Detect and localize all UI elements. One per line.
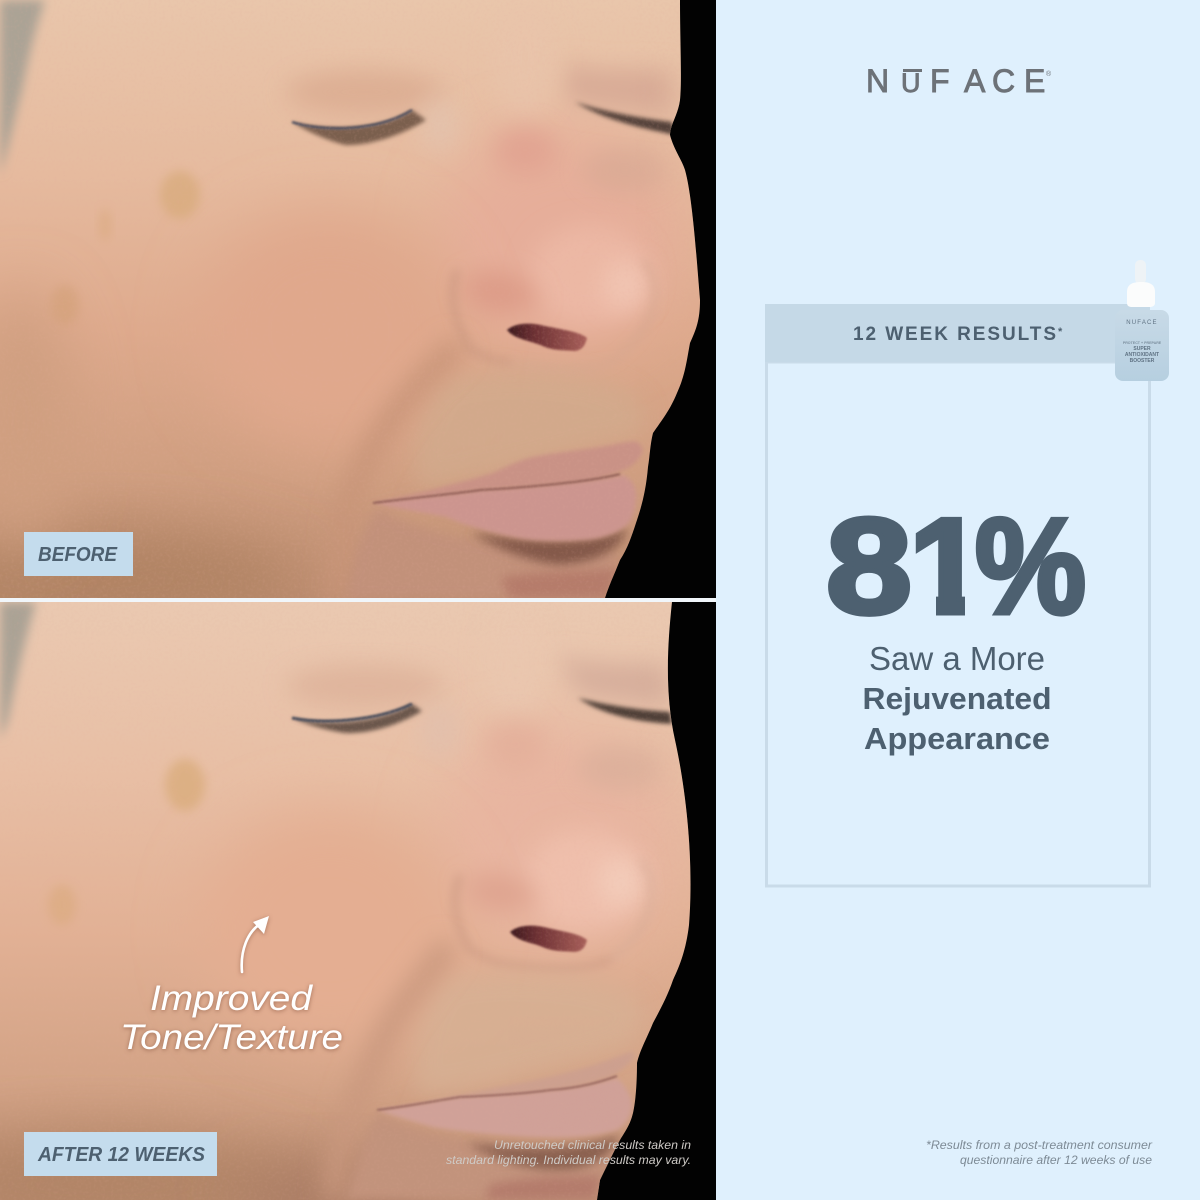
right eyelid <box>564 657 670 708</box>
eye lash left <box>292 704 422 733</box>
chin <box>348 1146 617 1200</box>
upper lip skin <box>426 433 568 476</box>
hair <box>0 602 36 740</box>
lower lip shadow <box>470 528 628 565</box>
icon: product bottle: BOOSTER <box>1130 358 1155 364</box>
photo: after <box>0 600 716 1200</box>
nose bridge <box>493 0 557 120</box>
upper lip skin <box>423 1033 596 1092</box>
statistic: 81% <box>826 490 1086 642</box>
photo disclaimer <box>446 1138 691 1167</box>
sun spots <box>160 171 200 219</box>
footnote: questionnaire after 12 weeks of use <box>960 1153 1152 1167</box>
header asterisk: * <box>1058 326 1063 338</box>
nose bridge <box>483 600 547 720</box>
label: before <box>24 532 133 576</box>
nostril <box>510 926 587 952</box>
hair <box>0 0 45 175</box>
logo: NuFACE: N <box>866 63 889 99</box>
photo divider <box>0 598 716 602</box>
skin texture <box>298 110 670 559</box>
icon: product bottle: ANTIOXIDANT <box>1125 352 1159 358</box>
label: before: BEFORE <box>38 544 118 566</box>
results panel <box>765 304 1150 886</box>
icon: product bottle: SUPER <box>1133 346 1151 352</box>
callout: improved tone/texture: Improved <box>150 979 314 1018</box>
eye lash left <box>292 110 426 145</box>
footnote <box>926 1138 1153 1167</box>
logo: NuFACE: ® <box>1046 70 1052 78</box>
eyelid shading left <box>296 664 434 706</box>
nasolabial fold <box>358 342 461 474</box>
panel header bar <box>765 304 1150 362</box>
nostril <box>507 324 587 351</box>
sun spots <box>165 759 205 811</box>
statistic caption: Saw a More <box>869 640 1045 677</box>
logo: NuFACE: E <box>1024 63 1045 99</box>
panel header text: 12 WEEK RESULTS <box>853 324 1056 345</box>
footnote: *Results from a post-treatment consumer <box>926 1138 1153 1152</box>
statistic caption <box>862 640 1052 756</box>
photo disclaimer: standard lighting. Individual results may vary. <box>446 1153 691 1167</box>
logo: NuFACE: U <box>901 68 920 98</box>
lips <box>420 442 642 495</box>
skin texture <box>0 602 716 1200</box>
statistic: 81%: 8 <box>826 490 912 642</box>
logo: NuFACE: F <box>930 63 950 99</box>
right background panel <box>716 0 1200 1200</box>
under eye right <box>602 156 651 182</box>
logo: NuFACE: C <box>992 63 1015 99</box>
icon: product bottle: PROTECT + PREPARE <box>1123 341 1162 345</box>
nose ala edge <box>450 275 480 354</box>
nose tip <box>536 837 619 928</box>
callout: improved tone/texture: Tone/Texture <box>120 1018 343 1057</box>
lower lip shadow <box>467 1135 620 1170</box>
statistic: 81%: 1 <box>909 490 985 642</box>
photo: before <box>0 0 716 630</box>
nose tip <box>540 236 630 322</box>
photo disclaimer: Unretouched clinical results taken in <box>494 1138 691 1152</box>
nose ala edge <box>452 880 603 966</box>
icon: product bottle <box>1115 260 1169 381</box>
icon: product bottle: NUFACE <box>1126 320 1158 326</box>
nasolabial fold <box>334 945 450 1200</box>
mouth line <box>373 474 620 503</box>
callout: improved tone/texture <box>120 979 343 1057</box>
lips <box>377 1052 634 1110</box>
right eyelid <box>564 62 672 118</box>
panel outline <box>766 362 1150 886</box>
logo: NuFACE <box>866 63 1052 99</box>
label: after 12 weeks: AFTER 12 WEEKS <box>37 1144 206 1166</box>
logo: NuFACE: A <box>964 63 986 99</box>
eyelid shading left <box>285 70 445 114</box>
statistic caption: Rejuvenated <box>862 681 1052 716</box>
statistic caption: Appearance <box>864 721 1050 756</box>
label: after 12 weeks <box>24 1132 217 1176</box>
mouth line <box>377 1076 617 1110</box>
eye lash right <box>578 698 672 724</box>
eye lash right <box>575 102 675 135</box>
chin <box>354 558 621 594</box>
statistic: 81%: % <box>975 490 1086 642</box>
under eye right <box>594 754 650 782</box>
arrow: to improved area <box>242 916 269 972</box>
